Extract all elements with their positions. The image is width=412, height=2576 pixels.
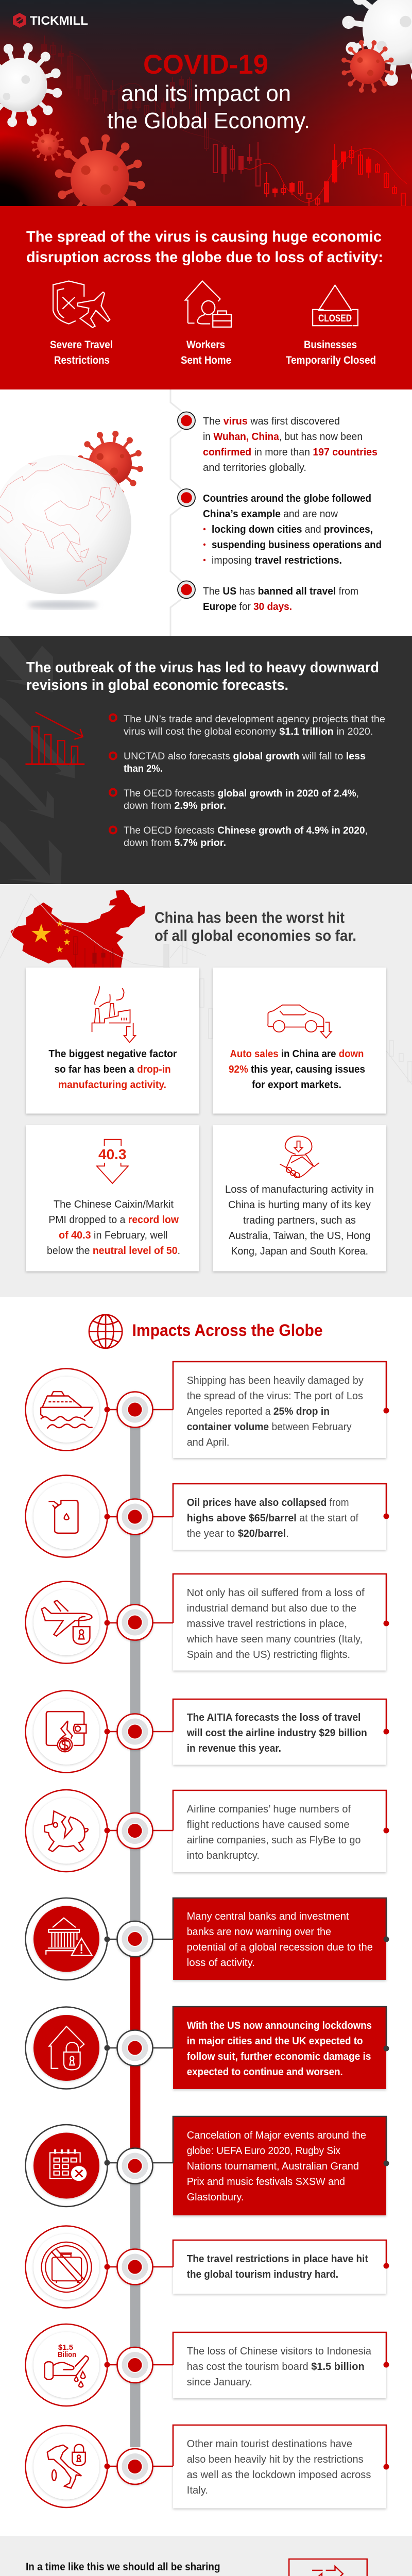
- impact: US and UK lockdowns: With the US now announcing lockdowns: [187, 2020, 372, 2031]
- impact: Italy lockdown: Other main tourist destinations have: [187, 2438, 352, 2450]
- forecast: UN cost: virus will cost the global economy $1.1 trillion in 2020.: [124, 726, 373, 737]
- icon: plane with lock: [42, 1601, 92, 1645]
- label: severe travel restrictions: Severe Travel: [50, 339, 113, 351]
- impact: US and UK lockdowns: [26, 2007, 389, 2089]
- fact: lockdowns: China’s example and are now: [203, 509, 338, 520]
- icon: white virus left: [0, 37, 68, 133]
- logo: TICKMILL: [30, 14, 88, 28]
- label: severe travel restrictions: Restrictions: [54, 354, 110, 366]
- label: workers sent home: Sent Home: [181, 354, 231, 366]
- heading: revisions in global economic forecasts.: [26, 677, 288, 693]
- impact: Indonesia tourism: [26, 2324, 389, 2406]
- forecast: UNCTAD: UNCTAD also forecasts global growth will fall to less: [124, 751, 366, 762]
- heading: disruption across the globe due to loss of activity:: [26, 249, 383, 266]
- impact: airline bankruptcy: airline companies, such as FlyBe to go: [187, 1835, 360, 1846]
- impact: flights restricted: [26, 1574, 389, 1670]
- forecast: OECD global: down from 2.9% prior.: [124, 801, 226, 811]
- label: businesses temporarily closed: [286, 339, 376, 366]
- impact: oil prices: highs above $65/barrel at the start of: [187, 1513, 358, 1524]
- panel: hero header: [0, 0, 412, 228]
- icon: handshake: [280, 1136, 319, 1178]
- card: trading partners: [213, 1125, 386, 1272]
- fact: lockdowns: locking down cities and provinces,: [212, 524, 373, 535]
- impact: shipping: Shipping has been heavily damaged by: [187, 1375, 364, 1386]
- card: manufacturing drop: so far has been a drop-in: [55, 1064, 171, 1075]
- impact: airline revenue: The AITIA forecasts the loss of travel: [187, 1712, 360, 1723]
- card: trading partners: Australia, Taiwan, the US, Hong: [229, 1230, 370, 1242]
- list: forecasts: [110, 714, 385, 849]
- icon: ship: [41, 1392, 93, 1429]
- impact: events cancelled: Nations tournament, Australian Grand: [187, 2161, 359, 2172]
- forecast: UNCTAD: [110, 751, 366, 774]
- icon: broken piggy bank: [45, 1811, 88, 1852]
- icon: hand dropping money: [45, 2343, 89, 2387]
- impact: airline bankruptcy: [26, 1790, 389, 1872]
- icon: red virus top right: [336, 35, 400, 98]
- impact: flights restricted: massive travel restrictions in place,: [187, 1618, 347, 1630]
- forecast: OECD global: [110, 788, 359, 811]
- impact: events cancelled: [26, 2116, 389, 2215]
- impact: shipping: the spread of the virus: The port of Los: [187, 1391, 363, 1402]
- fact: virus origin: confirmed in more than 197 countries: [203, 447, 377, 458]
- icon: falling bar chart: [25, 712, 84, 764]
- impact: airline revenue: will cost the airline industry $29 billion: [186, 1727, 367, 1739]
- impact: Indonesia tourism: The loss of Chinese visitors to Indonesia: [187, 2346, 372, 2357]
- impact: events cancelled: Cancelation of Major events around the: [187, 2130, 366, 2141]
- card: trading partners: Kong, Japan and South Korea.: [231, 1246, 368, 1257]
- impact: US and UK lockdowns: follow suit, further economic damage is: [187, 2051, 371, 2062]
- impact: tourism hit: [26, 2226, 389, 2308]
- card: manufacturing drop: [26, 968, 199, 1114]
- impact: oil prices: Oil prices have also collapsed from: [187, 1497, 349, 1509]
- icon: worker sent home: [185, 281, 231, 327]
- chart: faded candlesticks behind title: [25, 36, 209, 151]
- title: the Global Economy.: [107, 108, 310, 133]
- card: trading partners: trading partners, such as: [243, 1215, 356, 1226]
- impact: US and UK lockdowns: in major cities and the UK expected to: [187, 2036, 363, 2047]
- impact: shipping: [26, 1361, 389, 1458]
- impact: Italy lockdown: Italy.: [187, 2485, 208, 2496]
- impact: Indonesia tourism: since January.: [187, 2377, 252, 2388]
- impact: oil prices: [26, 1476, 389, 1557]
- impact: shipping: Angeles reported a 25% drop in: [187, 1406, 330, 1417]
- card: auto sales: for export markets.: [252, 1079, 341, 1091]
- impact: shipping: container volume between February: [187, 1421, 352, 1433]
- impact: airline bankruptcy: flight reductions have caused some: [187, 1819, 350, 1831]
- text block: share information: In a time like this we should all be sharing: [26, 2561, 220, 2573]
- impact: Indonesia tourism: has cost the tourism board $1.5 billion: [187, 2361, 365, 2372]
- illustration: China map with flag stars: [10, 890, 145, 968]
- fact: virus origin: [178, 412, 377, 473]
- fact: virus origin: The virus was first discovered: [203, 416, 340, 427]
- icon: 40.3 down arrow: [97, 1140, 128, 1183]
- icon: white virus top right: [337, 0, 412, 91]
- impact: airline bankruptcy: Airline companies’ huge numbers of: [187, 1804, 351, 1815]
- panel: call to action: [0, 2536, 412, 2576]
- title: and its impact on: [121, 81, 291, 106]
- forecast: OECD China: The OECD forecasts Chinese growth of 4.9% in 2020,: [124, 825, 368, 836]
- icon: car: [268, 1005, 332, 1038]
- icon: calendar cancelled: [50, 2149, 87, 2181]
- forecast: OECD China: [110, 825, 368, 849]
- impact: flights restricted: Not only has oil suffered from a loss of: [187, 1587, 365, 1599]
- icon: no luggage: [42, 2242, 92, 2292]
- card: auto sales: Auto sales in China are down: [230, 1048, 364, 1060]
- impact: Italy lockdown: as well as the lockdown imposed across: [187, 2469, 371, 2481]
- impact: airline bankruptcy: into bankruptcy.: [187, 1850, 260, 1861]
- impact: Italy lockdown: also been heavily hit by the restrictions: [187, 2454, 364, 2465]
- card: auto sales: 92% this year, causing issues: [229, 1064, 365, 1075]
- forecast: UN cost: [110, 714, 385, 737]
- card: trading partners: Loss of manufacturing activity in: [225, 1184, 374, 1195]
- fact: US travel ban: The US has banned all travel from: [203, 586, 358, 597]
- heading: [26, 228, 383, 266]
- panel: China worst hit: [0, 884, 412, 1297]
- fact: lockdowns: [178, 489, 382, 566]
- panel: virus spread facts: [0, 389, 412, 636]
- impact: central banks warning: banks are now warning over the: [187, 1926, 331, 1938]
- impact: central banks warning: loss of activity.: [187, 1957, 255, 1969]
- impact: oil prices: the year to $20/barrel.: [187, 1528, 289, 1539]
- heading: [154, 909, 356, 944]
- panel: forecast revisions: [0, 636, 412, 884]
- icon: broken wallet: [46, 1711, 86, 1752]
- impact: flights restricted: industrial demand but also due to the: [187, 1603, 356, 1614]
- impact: flights restricted: Spain and the US) restricting flights.: [187, 1649, 350, 1660]
- impact: flights restricted: which have seen many countries (Italy,: [186, 1634, 363, 1645]
- heading with globe icon: [89, 1315, 323, 1348]
- impact: airline revenue: in revenue this year.: [187, 1743, 281, 1754]
- card: auto sales: [213, 968, 386, 1114]
- label: businesses temporarily closed: Temporarily Closed: [286, 354, 376, 366]
- impact: airline revenue: [26, 1691, 389, 1772]
- fact: virus origin: in Wuhan, China, but has now been: [203, 431, 363, 443]
- title: [107, 49, 310, 133]
- impact: shipping: and April.: [187, 1437, 229, 1448]
- forecast: OECD China: down from 5.7% prior.: [124, 838, 226, 849]
- impact: tourism hit: The travel restrictions in place have hit: [187, 2253, 368, 2265]
- forecast: UNCTAD: than 2%.: [124, 764, 163, 774]
- icon: hand dropping money: Bilion: [58, 2350, 76, 2359]
- label: workers sent home: Workers: [186, 339, 225, 351]
- heading: [26, 659, 379, 693]
- impact: events cancelled: globe: UEFA Euro 2020, Rugby Six: [187, 2145, 340, 2157]
- fact: virus origin: and territories globally.: [203, 462, 306, 473]
- impact: central banks warning: [26, 1898, 389, 1980]
- heading: The outbreak of the virus has led to heavy downward: [26, 659, 379, 676]
- icon: monitor with share: [289, 2559, 383, 2576]
- icon: large red virus: [51, 130, 149, 228]
- timeline bar: [130, 1422, 140, 2447]
- fact: lockdowns: suspending business operations and: [212, 539, 382, 551]
- card: manufacturing drop: The biggest negative factor: [48, 1048, 177, 1060]
- forecast: UN cost: The UN’s trade and development agency projects that the: [124, 714, 385, 725]
- impact: events cancelled: Glastonbury.: [187, 2192, 244, 2203]
- heading: of all global economies so far.: [154, 927, 356, 944]
- icon: closed sign: CLOSED: [318, 313, 352, 324]
- chart: bright candlesticks bottom right: [71, 53, 407, 206]
- card: PMI record low: of 40.3 in February, well: [59, 1230, 168, 1241]
- icon: travel restrictions: [53, 281, 110, 328]
- label: workers sent home: [181, 339, 231, 366]
- card: trading partners: China is hurting many of its key: [228, 1199, 371, 1211]
- heading: China has been the worst hit: [154, 909, 345, 926]
- fact: lockdowns: imposing travel restrictions.: [212, 555, 342, 566]
- icon: oil can: [48, 1500, 78, 1533]
- icon: bank with warning: [46, 1918, 92, 1955]
- card: PMI record low: below the neutral level of 50.: [47, 1245, 180, 1257]
- title: COVID-19: [143, 49, 268, 80]
- panel: economic disruption: [0, 206, 412, 389]
- icon: 40.3 down arrow: 40.3: [98, 1146, 127, 1162]
- impact: Italy lockdown: [26, 2425, 389, 2508]
- panel: impacts across the globe: [0, 1297, 412, 2536]
- heading with globe icon: Impacts Across the Globe: [132, 1321, 323, 1340]
- heading: The spread of the virus is causing huge economic: [26, 228, 382, 245]
- label: businesses temporarily closed: Businesses: [304, 339, 357, 351]
- card: PMI record low: The Chinese Caixin/Markit: [54, 1199, 174, 1210]
- icon: house with lock: [49, 2026, 84, 2070]
- forecast: OECD global: The OECD forecasts global growth in 2020 of 2.4%,: [124, 788, 359, 799]
- fact: US travel ban: Europe for 30 days.: [203, 601, 292, 613]
- card: PMI record low: [26, 1125, 199, 1272]
- icon: Italy with lock: [47, 2445, 85, 2488]
- icon: closed sign: [313, 285, 358, 326]
- icon: hand dropping money: $1.5: [58, 2343, 73, 2352]
- icon: factory: [92, 986, 135, 1042]
- icon: small red virus: [29, 126, 66, 163]
- illustration: globe with virus: [0, 427, 147, 609]
- impact: central banks warning: potential of a global recession due to the: [187, 1942, 373, 1953]
- fact: lockdowns: Countries around the globe followed: [203, 493, 371, 504]
- impact: US and UK lockdowns: expected to continue and worsen.: [187, 2066, 343, 2078]
- fact: US travel ban: [178, 581, 358, 613]
- card: PMI record low: PMI dropped to a record low: [48, 1214, 179, 1226]
- impact: tourism hit: the global tourism industry hard.: [187, 2269, 338, 2280]
- label: severe travel restrictions: [50, 339, 113, 366]
- card: manufacturing drop: manufacturing activity.: [58, 1079, 166, 1091]
- impact: central banks warning: Many central banks and investment: [187, 1911, 349, 1922]
- impact: events cancelled: Prix and music festivals SXSW and: [187, 2176, 345, 2188]
